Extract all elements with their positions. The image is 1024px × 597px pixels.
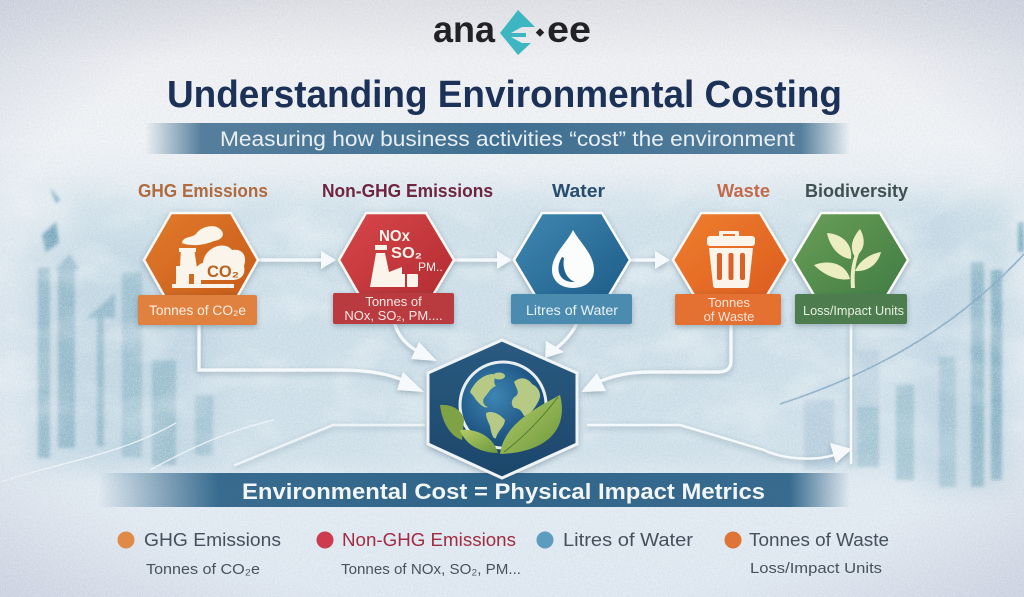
label: Tonnes of Waste: Tonnes — [708, 295, 750, 310]
legend: GHG Emissions — [118, 530, 281, 578]
legend: Tonnes of Waste: Loss/Impact Units — [750, 560, 882, 577]
icon: factory and CO2 cloud — [172, 226, 245, 288]
hexagon: Waste — [673, 213, 788, 307]
heading: GHG Emissions: GHG Emissions — [138, 181, 268, 201]
hexagon: GHG — [144, 213, 258, 308]
legend: GHG Emissions: GHG Emissions — [144, 530, 281, 550]
logo — [433, 9, 591, 55]
title: Understanding Environmental Costing — [167, 74, 842, 116]
legend — [118, 530, 889, 578]
icon: logo diamond — [500, 10, 535, 55]
Biodiversity card — [793, 181, 908, 324]
icon: trash bin — [707, 231, 755, 288]
icon: factory with pollutants: NOx — [379, 228, 410, 245]
legend: Non-GHG Emissions — [316, 530, 521, 578]
legend: Non-GHG Emissions: Tonnes of NOx, SO₂, PM... — [341, 561, 521, 578]
heading: Biodiversity: Biodiversity — [805, 181, 908, 201]
logo: ana — [433, 9, 495, 50]
logo dot — [536, 28, 544, 37]
heading: Non-GHG Emissions: Non-GHG Emissions — [322, 181, 493, 201]
arrows: flow into the centre hexagon — [199, 251, 852, 465]
hexagon: Biodiversity — [793, 213, 908, 307]
hexagon: Non-GHG — [339, 213, 454, 307]
label: Tonnes of Waste: of Waste — [704, 309, 754, 324]
central hexagon: globe with leaves — [428, 340, 577, 478]
label: Tonnes of NOx, SO2, PM: Tonnes of — [365, 294, 422, 309]
legend: Litres of Water: Litres of Water — [563, 530, 693, 550]
heading: Water: Water — [552, 181, 605, 201]
label: Tonnes of NOx, SO2, PM — [333, 293, 454, 324]
subtitle band — [145, 123, 850, 154]
label: Tonnes of Waste — [675, 294, 781, 325]
label: Tonnes of CO2e: Tonnes of CO₂e — [149, 303, 246, 318]
logo suffix: ee — [547, 9, 591, 50]
formula band — [98, 473, 850, 507]
label: Loss/Impact Units — [795, 294, 907, 324]
icon: factory with pollutants — [370, 228, 443, 287]
formula text: Environmental Cost = Physical Impact Metrics — [242, 479, 765, 504]
icon: sprout — [814, 229, 881, 288]
label: Tonnes of CO2e — [138, 295, 257, 325]
label: Tonnes of NOx, SO2, PM: NOx, SO₂, PM.... — [344, 308, 443, 323]
label: Litres of Water: Litres of Water — [526, 303, 619, 318]
subtitle: Measuring how business activities “cost” the environment — [220, 128, 795, 151]
icon: factory with pollutants: SO₂ — [391, 245, 422, 262]
hexagon: Water — [514, 213, 630, 307]
icon: globe — [460, 362, 546, 448]
icon: factory with pollutants: PM.. — [418, 260, 443, 274]
legend: Tonnes of Waste: Tonnes of Waste — [749, 530, 889, 550]
heading: Waste: Waste — [717, 181, 770, 201]
Water card — [511, 181, 632, 324]
label: Litres of Water — [511, 294, 632, 324]
Waste card — [673, 181, 788, 325]
label: Loss/Impact Units: Loss/Impact Units — [803, 303, 904, 318]
icon: water drop — [552, 230, 594, 288]
legend: Tonnes of Waste — [724, 530, 889, 577]
GHG Emissions card — [138, 181, 268, 325]
icon: factory and CO2 cloud: CO₂ — [207, 263, 239, 281]
Non-GHG Emissions card — [322, 181, 493, 324]
icon: leaves — [440, 395, 562, 454]
legend: GHG Emissions: Tonnes of CO₂e — [146, 561, 260, 578]
legend: Non-GHG Emissions: Non-GHG Emissions — [342, 530, 516, 550]
